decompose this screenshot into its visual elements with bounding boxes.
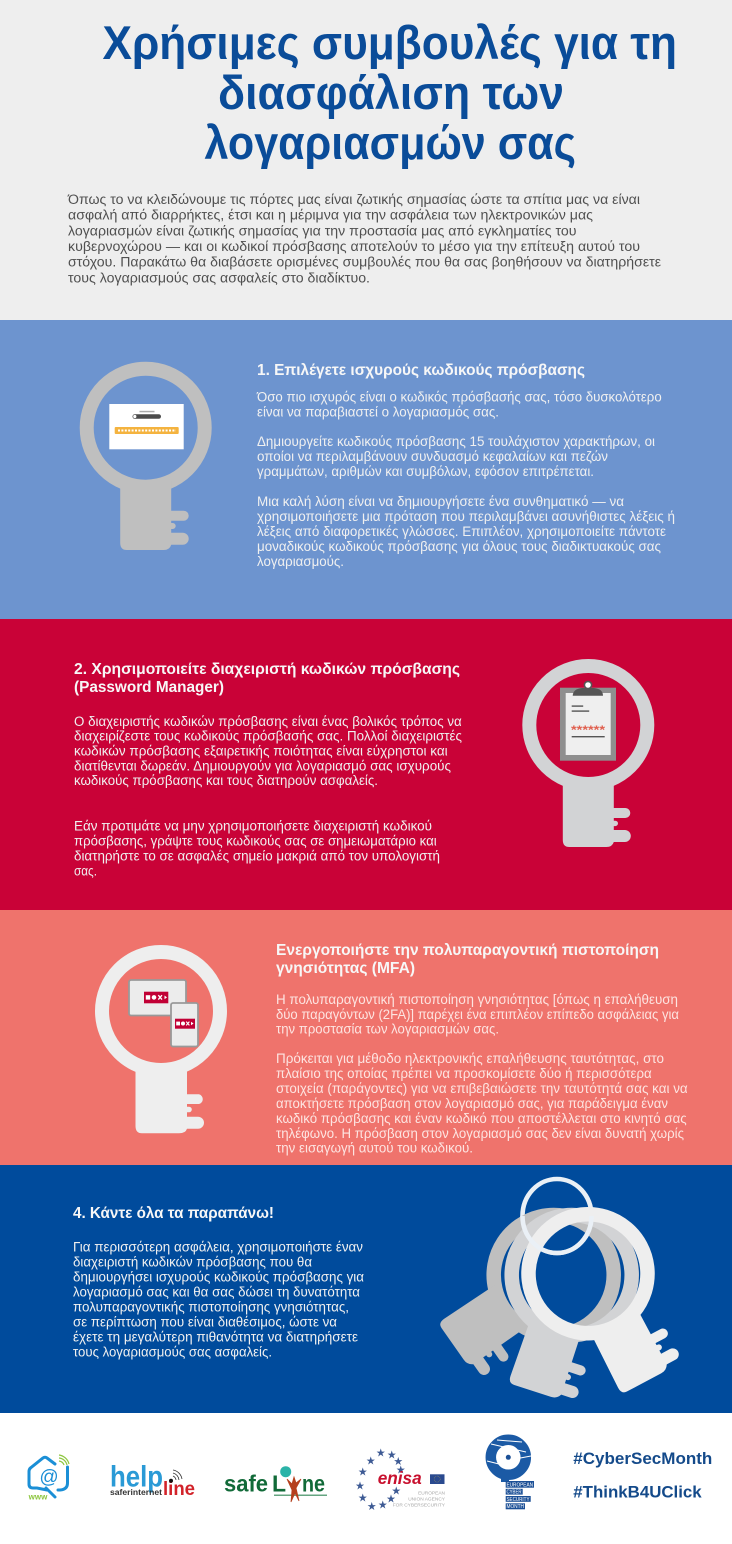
intro text: Όπως το να κλειδώνουμε τις πόρτες μας είναι ζωτικής σημασίας ώστε τα σπίτια μας να είναι xyxy=(67,192,640,207)
body text: χρησιμοποιήσετε μια πρόταση που περιλαμβάνει ασυνήθιστες λέξεις ή xyxy=(257,509,675,524)
logo: enisa: ★ xyxy=(358,1467,367,1477)
body text: λογαριασμούς. xyxy=(257,554,344,569)
heading xyxy=(74,661,460,696)
body text: στοιχεία (παράγοντες) για να επιβεβαιώσετε την ταυτότητά σας και να xyxy=(276,1081,688,1096)
intro text: τους λογαριασμούς σας ασφαλείς στο διαδίκτυο. xyxy=(68,270,370,285)
logo: enisa: EUROPEAN xyxy=(418,1490,446,1496)
panel: password manager xyxy=(0,619,732,910)
icon: bunch of three keys on a ring xyxy=(419,1179,698,1410)
body text: σας. xyxy=(74,864,97,879)
title: λογαριασμών σας xyxy=(204,116,576,169)
intro text xyxy=(67,192,661,285)
heading: Ενεργοποιήστε την πολυπαραγοντική πιστοποίηση xyxy=(276,942,659,959)
body text: κωδικών πρόσβασης εξαιρετικής ποιότητας είναι εύχρηστοι και xyxy=(74,743,448,758)
intro text: στόχου. Παρακάτω θα διαβάσετε ορισμένες συμβουλές που θα σας βοηθήσουν να διατηρήσετε xyxy=(68,255,661,270)
body text: Μια καλή λύση είναι να δημιουργήσετε ένα συνθηματικό — να xyxy=(257,494,624,509)
body text: δημιουργήσει ισχυρούς κωδικούς πρόσβασης για xyxy=(73,1270,364,1285)
panel: do all of the above xyxy=(0,1165,732,1413)
icon: key with password card xyxy=(87,369,205,550)
body text: Δημιουργείτε κωδικούς πρόσβασης 15 τουλάχιστον χαρακτήρων, οι xyxy=(257,434,655,449)
body text: τους λογαριασμούς σας ασφαλείς. xyxy=(73,1345,272,1360)
logo: European Cyber Security Month: SECURITY xyxy=(506,1497,530,1503)
hashtags xyxy=(573,1449,712,1502)
body text: διατηρήστε το σε ασφαλές σημείο μακριά από τον υπολογιστή xyxy=(74,849,440,864)
body text: σε περίπτωση που είναι διαθέσιμος, ώστε να xyxy=(73,1315,337,1330)
panel: strong passwords xyxy=(0,320,732,619)
logo: enisa: ★ xyxy=(387,1450,396,1460)
body text: Για περισσότερη ασφάλεια, χρησιμοποιήστε έναν xyxy=(73,1240,363,1255)
panel: multi-factor authentication xyxy=(0,910,732,1165)
logo: house with at sign: @ xyxy=(39,1467,59,1488)
logo: enisa: enisa xyxy=(378,1468,422,1488)
hashtags: #CyberSecMonth xyxy=(573,1449,712,1468)
logo: help line: help xyxy=(110,1461,163,1494)
logo: enisa: ★ xyxy=(394,1456,403,1466)
logo: enisa: ★ xyxy=(358,1493,367,1503)
panel: header xyxy=(0,0,732,320)
logo: enisa: ★ xyxy=(386,1494,396,1504)
body text: λογαριασμό σας και θα σας δώσει τη δυνατότητα xyxy=(73,1285,360,1300)
logo: enisa: ★ xyxy=(396,1465,405,1475)
body text: μοναδικούς κωδικούς πρόσβασης για όλους τους διαδικτυακούς σας xyxy=(257,539,661,554)
body text: γραμμάτων, αριθμών και συμβόλων, εφόσον επιτρέπεται. xyxy=(257,464,594,479)
logo: enisa: ★ xyxy=(392,1486,401,1496)
logo: enisa: ★ xyxy=(378,1500,387,1510)
body text: πρόσβασης, γράψτε τους κωδικούς σας σε σημειωματάριο και xyxy=(74,834,437,849)
logo: help line: saferinternet xyxy=(110,1487,162,1497)
body text: Ο διαχειριστής κωδικών πρόσβασης είναι ένας βολικός τρόπος να xyxy=(74,714,462,729)
body text: λέξεις από διαφορετικές γλώσσες. Επιπλέον, χρησιμοποιείτε πάντοτε xyxy=(257,524,666,539)
logo: enisa: ★ xyxy=(366,1456,375,1466)
logo: European Cyber Security Month xyxy=(487,1440,534,1510)
logo: enisa: FOR CYBERSECURITY xyxy=(393,1502,446,1508)
body text: την προστασία των λογαριασμών σας. xyxy=(276,1022,499,1037)
title: διασφάλιση των xyxy=(218,66,564,119)
hashtags: #ThinkB4UClick xyxy=(573,1483,702,1502)
body text: οποίοι να περιλαμβάνουν συνδυασμό κεφαλαίων και πεζών xyxy=(257,449,608,464)
logo: enisa: ★ xyxy=(355,1481,365,1491)
body text: είναι να παραβιαστεί ο λογαριασμός σας. xyxy=(257,405,499,420)
icon: key with clipboard: ****** xyxy=(571,725,606,737)
logo: enisa: ★ xyxy=(376,1448,385,1458)
body text: διαχειριστή κωδικών πρόσβασης που θα xyxy=(73,1255,312,1270)
heading: (Password Manager) xyxy=(74,679,224,696)
body text: δύο παραγόντων (2FA)] παρέχει ένα επιπλέον επίπεδο ασφάλειας για xyxy=(276,1007,679,1022)
body text: αποκτήσετε πρόσβαση στον λογαριασμό σας, για παράδειγμα έναν xyxy=(276,1096,668,1111)
body text: πλαίσιο της οποίας πρέπει να προσκομίσετε δύο ή περισσότερα xyxy=(276,1066,652,1081)
heading: 2. Χρησιμοποιείτε διαχειριστή κωδικών πρόσβασης xyxy=(74,661,460,678)
icon: key with clipboard xyxy=(529,666,647,847)
intro text: λογαριασμών είναι ζωτικής σημασίας για την προστασία μας από εγκληματίες του xyxy=(68,223,576,238)
heading: 1. Επιλέγετε ισχυρούς κωδικούς πρόσβασης xyxy=(257,362,585,379)
body text: Πρόκειται για μέθοδο ηλεκτρονικής επαλήθευσης ταυτότητας, στο xyxy=(276,1051,664,1066)
intro text: ασφαλή από διαρρήκτες, έτσι και η μέριμνα για την ασφάλεια των ηλεκτρονικών μας xyxy=(68,208,594,223)
logo: help line: line xyxy=(163,1479,195,1500)
logo: European Cyber Security Month: MONTH xyxy=(506,1504,524,1510)
body text: πολυπαραγοντικής πιστοποίησης γνησιότητας, xyxy=(73,1300,349,1315)
heading: γνησιότητας (MFA) xyxy=(276,960,415,977)
logo: European Cyber Security Month: EUROPEAN xyxy=(506,1482,533,1488)
body text xyxy=(73,1240,364,1360)
title: Χρήσιμες συμβουλές για τη xyxy=(102,16,677,69)
panel: footer logos xyxy=(0,1413,732,1544)
logo: house with at sign: www xyxy=(28,1492,48,1502)
body text: έχετε τη μεγαλύτερη πιθανότητα να διατηρήσετε xyxy=(73,1330,358,1345)
body text: Όσο πιο ισχυρός είναι ο κωδικός πρόσβασής σας, τόσο δυσκολότερο xyxy=(256,390,662,405)
body text: Η πολυπαραγοντική πιστοποίηση γνησιότητας [όπως η επαλήθευση xyxy=(276,992,678,1007)
body text: διαχειρίζεστε τους κωδικούς πρόσβασής σας. Πολλοί διαχειριστές xyxy=(74,729,462,744)
heading: 4. Κάντε όλα τα παραπάνω! xyxy=(73,1205,274,1222)
body text: διατίθενται δωρεάν. Δημιουργούν για λογαριασμό σας ισχυρούς xyxy=(74,759,451,774)
body text xyxy=(276,992,688,1156)
body text xyxy=(74,714,462,879)
heading xyxy=(276,942,659,977)
logo: safe line: ne xyxy=(302,1471,325,1497)
logo: enisa: ★ xyxy=(367,1502,376,1512)
title xyxy=(102,16,677,169)
logo: safe line xyxy=(224,1466,327,1502)
logo: safe line: safe xyxy=(224,1471,268,1497)
logo: safe line: L xyxy=(272,1471,286,1497)
body text: τηλέφωνο. Η πρόσβαση στον λογαριασμό σας δεν είναι δυνατή χωρίς xyxy=(276,1126,684,1141)
body text xyxy=(256,390,675,569)
intro text: κυβερνοχώρου — και οι κωδικοί πρόσβασης αποτελούν το μέσο για την επίτευξη αυτού του xyxy=(68,239,640,254)
body text: κωδικούς πρόσβασης και τους διατηρούν ασφαλείς. xyxy=(74,773,378,788)
logo: help line xyxy=(110,1461,195,1500)
icon: key with tablet and phone xyxy=(102,952,220,1133)
logo: European Cyber Security Month: CYBER xyxy=(506,1490,522,1496)
logo: enisa xyxy=(355,1448,446,1512)
logo: enisa: UNION AGENCY xyxy=(408,1496,446,1502)
body text: την εισαγωγή αυτού του κωδικού. xyxy=(276,1141,473,1156)
body text: Εάν προτιμάτε να μην χρησιμοποιήσετε διαχειριστή κωδικού xyxy=(74,819,432,834)
logo: house with at sign xyxy=(28,1455,69,1502)
body text: κωδικό πρόσβασης και έναν κωδικό που αποστέλλεται στο κινητό σας xyxy=(276,1111,687,1126)
